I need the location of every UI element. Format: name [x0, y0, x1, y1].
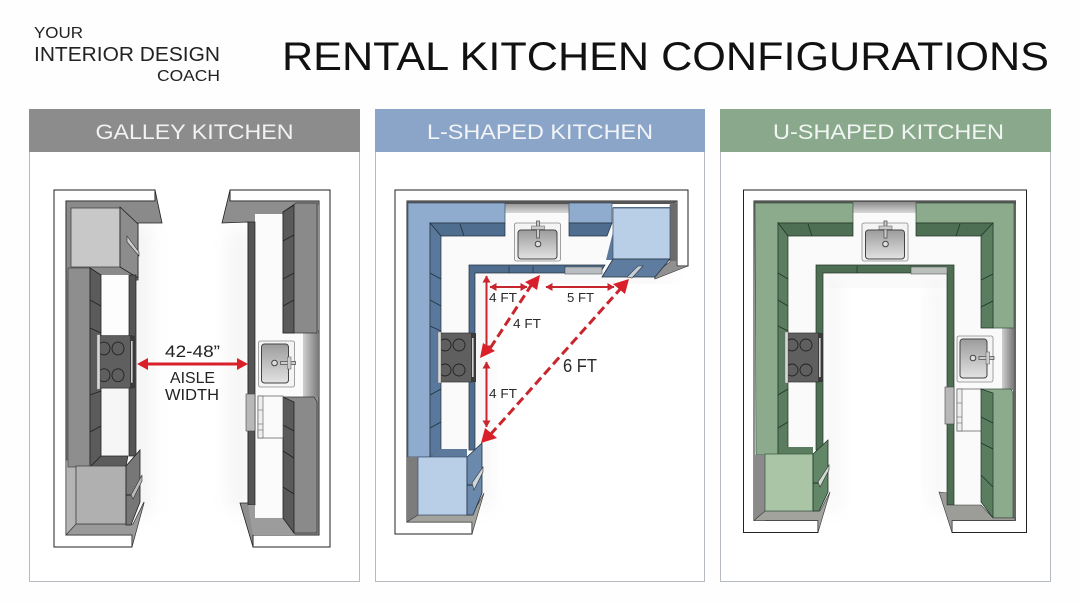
upper cabinets — [408, 203, 505, 457]
base cabinets — [469, 265, 605, 450]
base cabinets — [816, 265, 954, 505]
dishwasher — [945, 387, 982, 431]
stove — [438, 332, 476, 383]
dimension labels — [489, 291, 597, 401]
base cabinet — [129, 275, 136, 456]
floor plan: l-shaped — [395, 190, 688, 534]
upper cabinet top — [283, 203, 317, 333]
lower cabinet — [283, 397, 317, 533]
right sink — [957, 336, 994, 382]
wall end top right — [653, 201, 688, 279]
lower fridge — [90, 456, 128, 467]
dishwasher — [246, 394, 283, 438]
upper cabinets — [755, 203, 853, 455]
dimension labels: 5 FT — [567, 291, 594, 305]
dimension labels: 6 FT — [563, 355, 597, 376]
dimension labels: 4 FT — [489, 291, 517, 305]
stove — [97, 335, 135, 389]
floor plan: galley right run — [222, 190, 330, 547]
wall shade — [407, 201, 677, 204]
panel: u-shaped kitchen — [720, 109, 1051, 582]
counter — [780, 210, 1002, 518]
brand logo: YOUR — [34, 25, 83, 42]
brand logo — [34, 25, 220, 85]
heading: u-shaped kitchen: U-SHAPED KITCHEN — [773, 121, 1004, 144]
heading: l-shaped kitchen — [375, 109, 705, 152]
heading: l-shaped kitchen: L-SHAPED KITCHEN — [427, 121, 653, 144]
floor plan: galley left run — [54, 190, 162, 547]
right end — [939, 492, 1015, 532]
sink — [258, 341, 296, 387]
dimension labels: 4 FT — [513, 317, 541, 331]
top sink — [862, 221, 908, 261]
panel: galley kitchen — [29, 109, 360, 582]
dimension: aisle width — [137, 343, 248, 404]
title: RENTAL KITCHEN CONFIGURATIONS — [282, 35, 1049, 79]
stove — [785, 332, 823, 383]
fridge top — [71, 208, 120, 267]
dimension: aisle width: AISLE — [170, 370, 215, 387]
dimensions: l-shaped work triangle — [480, 275, 629, 443]
floor plan: u-shaped — [744, 190, 1026, 532]
brand logo: INTERIOR DESIGN — [34, 44, 220, 66]
panel: l-shaped kitchen — [375, 109, 705, 582]
brand logo: COACH — [157, 68, 220, 85]
sink — [514, 221, 560, 261]
heading: galley kitchen: GALLEY KITCHEN — [96, 121, 294, 144]
counter — [432, 206, 612, 450]
heading: u-shaped kitchen — [720, 109, 1051, 152]
dimension: aisle width: 42-48” — [165, 343, 220, 361]
upper cabinet — [68, 268, 90, 467]
dimension: aisle width: WIDTH — [165, 387, 219, 404]
fridge top right — [606, 207, 670, 260]
right lower cabinets — [981, 389, 1013, 518]
lower fridge — [778, 447, 813, 455]
lower fridge — [430, 449, 467, 457]
heading: galley kitchen — [29, 109, 360, 152]
dimension labels: 4 FT — [489, 387, 517, 401]
